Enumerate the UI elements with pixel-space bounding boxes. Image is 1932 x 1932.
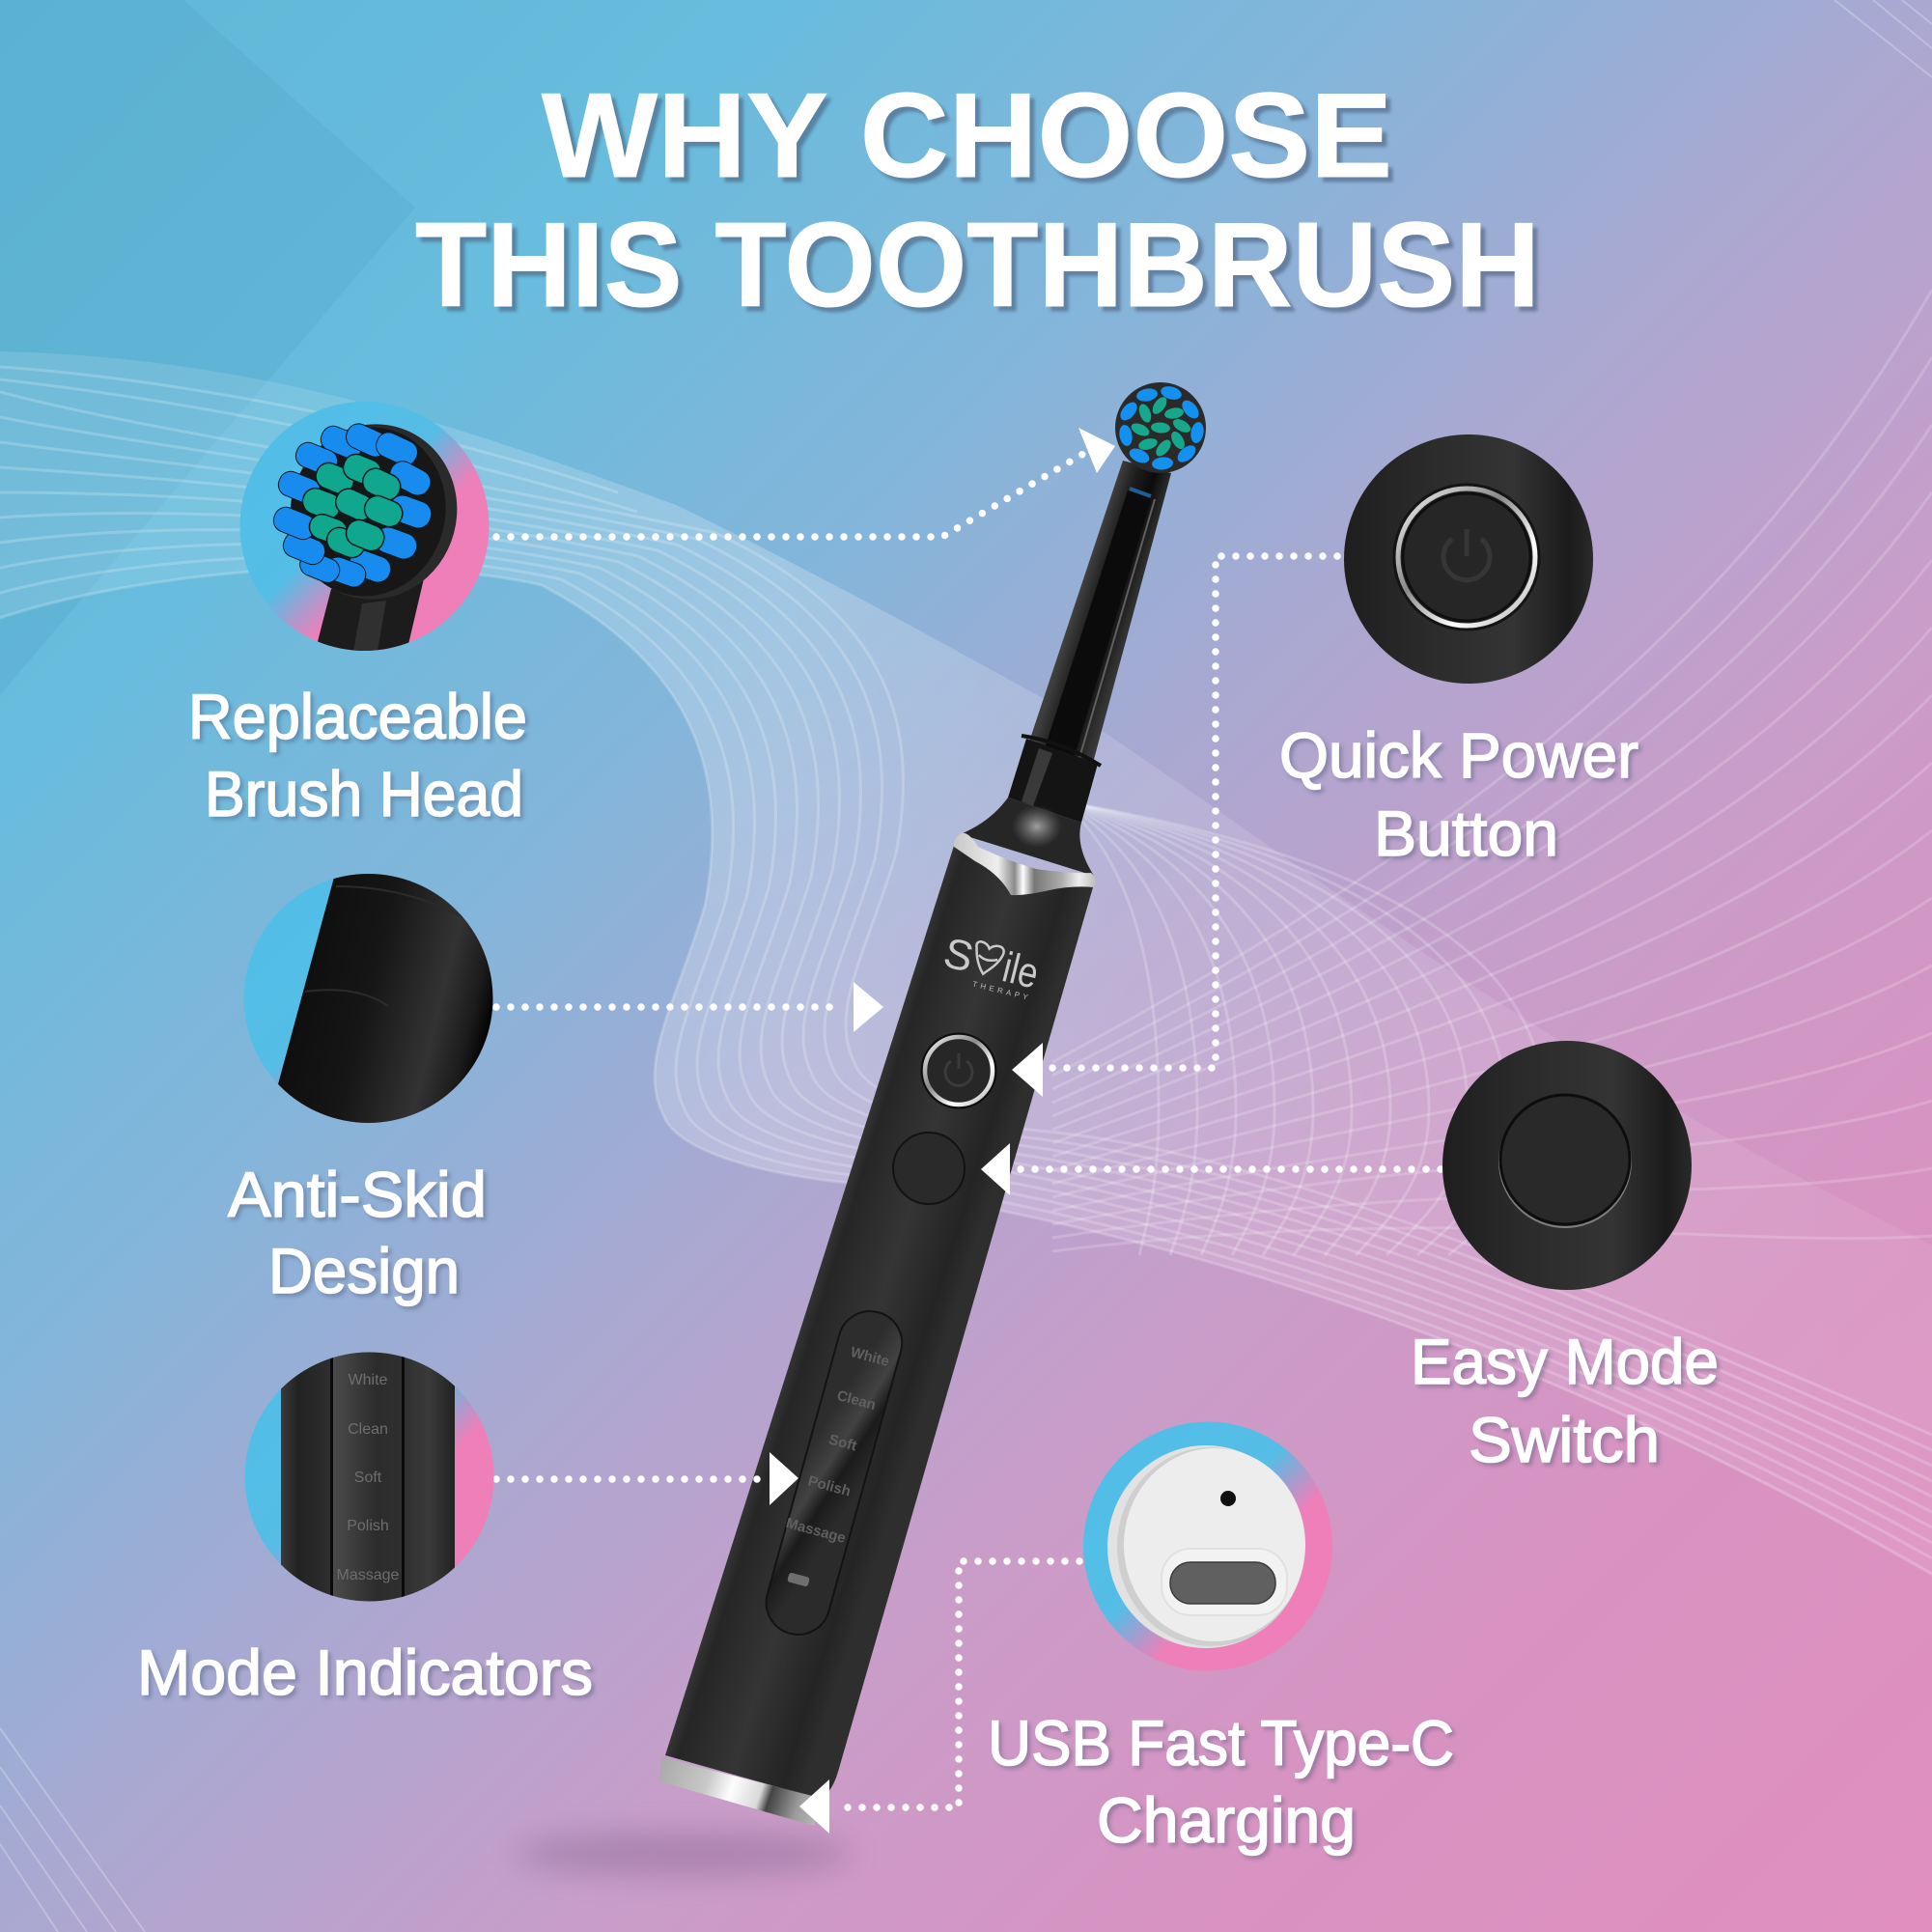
arrow: anti-skid (854, 982, 883, 1032)
mode indicator panel: Massage (784, 1515, 848, 1547)
feature label: quick power button: Button (1374, 798, 1558, 869)
dotted connector: brush head (496, 454, 1083, 537)
feature label: replaceable brush head: Brush Head (205, 758, 523, 829)
feature label: easy mode switch (1411, 1326, 1719, 1475)
brand logo: ile (998, 943, 1043, 998)
brand logo: S (939, 929, 978, 982)
feature: mode indicators image: Soft (354, 1470, 382, 1486)
feature label: quick power button: Quick Power (1279, 719, 1638, 791)
feature label: USB fast type-C charging (988, 1707, 1454, 1856)
feature: mode indicators image: Massage (337, 1567, 400, 1583)
dotted connector: mode switch (1016, 1165, 1441, 1173)
feature: mode indicators image: Polish (347, 1518, 389, 1534)
brush shaft (1029, 461, 1171, 763)
arrow: power button (1012, 1043, 1043, 1097)
arrow: mode switch (981, 1143, 1010, 1195)
collar (1008, 736, 1101, 823)
feature: quick power button image (1344, 434, 1593, 684)
feature: anti-skid image (243, 874, 492, 1123)
feature: mode indicators image (245, 1342, 494, 1612)
silver shoulder trim (954, 833, 1096, 895)
brand logo: THERAPY (971, 980, 1032, 1002)
dotted connector: anti-skid (496, 1003, 842, 1011)
mode indicator panel (759, 1303, 910, 1642)
feature label: quick power button (1279, 719, 1638, 869)
feature: replaceable brush head image (239, 402, 489, 657)
mode indicator panel: Polish (806, 1472, 853, 1500)
handle neck (961, 798, 1094, 876)
power button (922, 1034, 995, 1107)
mode indicator panel: Clean (835, 1387, 878, 1414)
feature label: mode indicators: Mode Indicators (137, 1637, 593, 1708)
silver base ring (659, 1757, 824, 1826)
feature label: replaceable brush head: Replaceable (188, 681, 527, 752)
handle body (665, 846, 1095, 1798)
feature: mode indicators image: Clean (348, 1421, 388, 1438)
arrow: brush head (1078, 428, 1115, 473)
mode button (893, 1133, 965, 1204)
feature: USB charging image (1083, 1421, 1332, 1670)
neck highlight (1012, 805, 1062, 848)
arrow: USB charging (799, 1779, 829, 1834)
feature label: replaceable brush head (188, 681, 527, 829)
toothbrush product (659, 382, 1206, 1826)
feature label: easy mode switch: Switch (1469, 1404, 1660, 1475)
dotted connector: USB charging (836, 1561, 1079, 1807)
feature label: USB fast type-C charging: USB Fast Type-C (988, 1707, 1454, 1778)
brush head top view (1115, 382, 1206, 473)
feature label: anti-skid design: Anti-Skid (228, 1159, 487, 1230)
feature: mode indicators image: White (349, 1372, 388, 1388)
feature: easy mode switch image (1442, 1041, 1692, 1290)
mode indicator panel: Soft (827, 1431, 858, 1454)
arrow: mode indicators (770, 1452, 798, 1505)
feature label: USB fast type-C charging: Charging (1097, 1784, 1356, 1856)
feature label: anti-skid design: Design (268, 1235, 460, 1306)
brand logo (938, 929, 1043, 1003)
feature label: anti-skid design (228, 1159, 487, 1306)
title: WHY CHOOSE (542, 70, 1392, 203)
title: THIS TOOTHBRUSH (415, 199, 1540, 332)
dotted connector: power button (1049, 556, 1337, 1068)
feature label: easy mode switch: Easy Mode (1411, 1326, 1719, 1397)
title (415, 70, 1540, 332)
dotted connector: mode indicators (496, 1475, 761, 1483)
brush shaft slot (1046, 489, 1155, 758)
mode indicator panel: White (849, 1344, 891, 1370)
brush shadow on floor (515, 1833, 853, 1875)
